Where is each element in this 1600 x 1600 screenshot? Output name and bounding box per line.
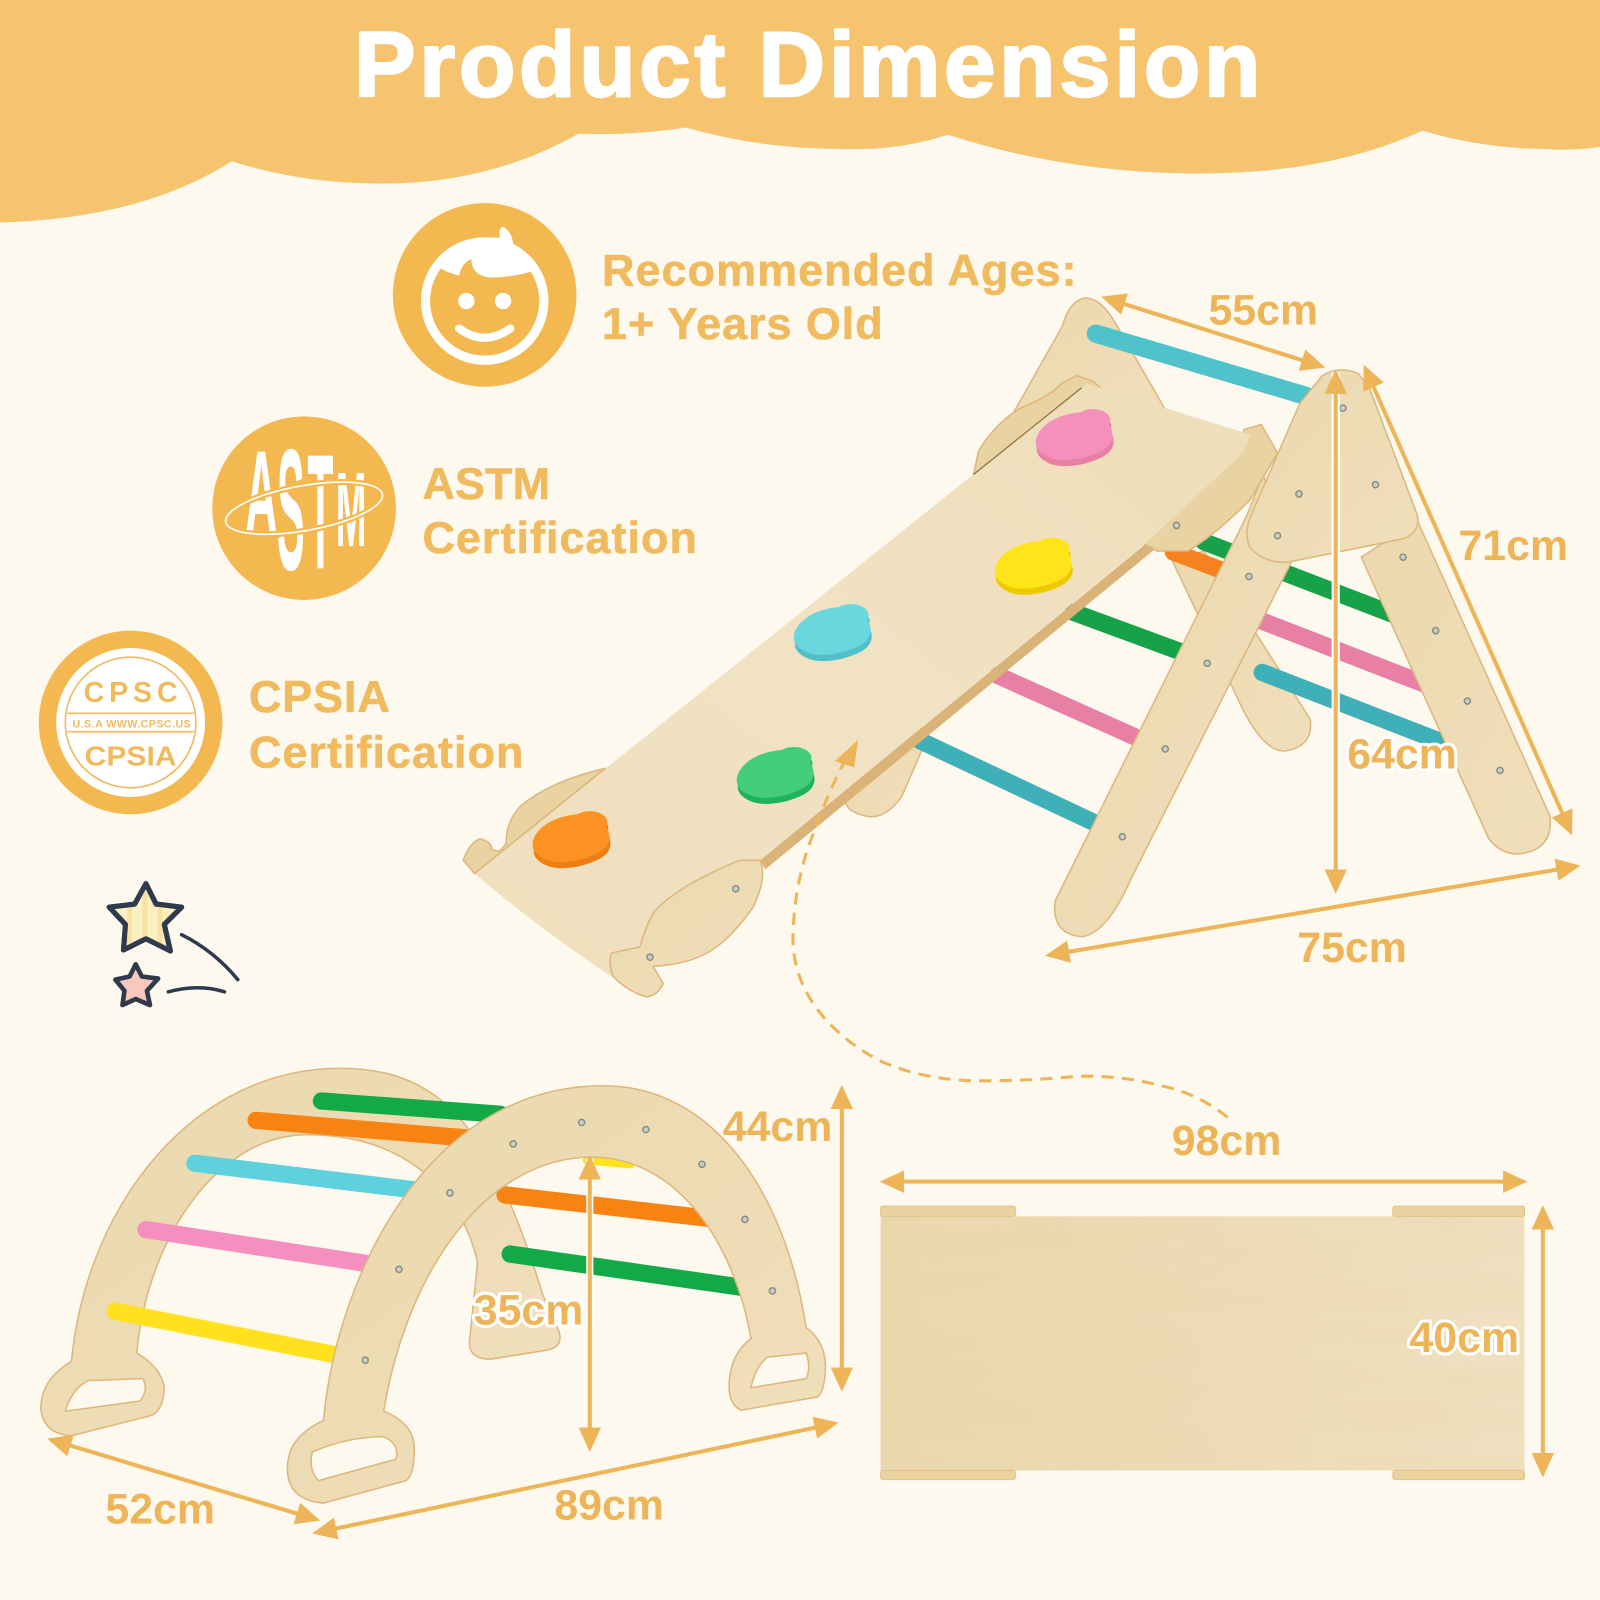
- rungs under the ramp: [920, 334, 1449, 822]
- icon: CPSC badge: CPSC: [84, 677, 178, 709]
- text: CPSIA certification: [249, 671, 523, 777]
- icon: ASTM badge: T: [307, 422, 333, 604]
- label 64cm: 64cm: [1347, 730, 1457, 778]
- front right leg: [1361, 520, 1550, 854]
- dimension: 89cm arrow: [316, 1423, 835, 1533]
- text: recommended ages: Recommended Ages:: [602, 245, 1077, 296]
- title: Product Dimension: [354, 14, 1260, 116]
- label 55cm: 55cm: [1208, 286, 1318, 334]
- header banner: [0, 0, 1600, 222]
- product: rainbow arch: [41, 1068, 826, 1503]
- dimension: 44cm arrow: [840, 1089, 844, 1388]
- icon: CPSC badge: [39, 631, 222, 814]
- text: recommended ages: [602, 245, 1077, 349]
- climbing holds: [533, 409, 1114, 868]
- label 35cm: 35cm: [474, 1286, 583, 1334]
- dashed connector arrow: [793, 740, 1228, 1117]
- product: triangle climber with ramp: [463, 298, 1550, 997]
- dimension: 71cm arrow: [1365, 368, 1570, 832]
- board wood grain: [881, 1216, 1524, 1470]
- text: ASTM certification: [422, 458, 697, 563]
- ramp lower rails: [463, 768, 605, 873]
- board corner tabs: [881, 1206, 1524, 1480]
- board surface: [881, 1216, 1524, 1470]
- ramp board: [474, 384, 1251, 993]
- icon: child face badge: [393, 203, 577, 387]
- top teal rung: [1096, 334, 1306, 396]
- text: CPSIA certification: CPSIA: [249, 671, 390, 722]
- text: ASTM certification: Certification: [422, 512, 697, 563]
- dimension: 98cm arrow: [884, 1180, 1523, 1184]
- back arch: [41, 1068, 560, 1436]
- back triangle frame: [1010, 298, 1170, 418]
- dimension: 40cm arrow: [1541, 1209, 1545, 1473]
- screws: [647, 405, 1503, 960]
- ramp board edge line: [474, 388, 1082, 873]
- label 98cm: 98cm: [1172, 1117, 1281, 1165]
- ramp underside edge: [760, 543, 1155, 869]
- icon: ASTM badge: S: [277, 413, 305, 607]
- dimension: 35cm arrow: [586, 1159, 593, 1448]
- label 44cm: 44cm: [723, 1103, 832, 1151]
- label 52cm: 52cm: [105, 1485, 215, 1533]
- arch rungs: [115, 1101, 745, 1355]
- dimension: 55cm arrow: [1105, 298, 1321, 366]
- icon: CPSC badge: U.S.A WWW.CPSC.US: [72, 719, 191, 731]
- label 75cm: 75cm: [1297, 924, 1407, 972]
- front triangle plate: [1247, 370, 1418, 562]
- icon: CPSC badge: CPSIA: [85, 740, 177, 771]
- text: recommended ages: 1+ Years Old: [602, 298, 883, 349]
- front arch: [287, 1086, 826, 1503]
- icon: stars: [109, 878, 238, 1005]
- ramp top rails: [973, 376, 1102, 474]
- icon: ASTM badge: [212, 413, 396, 607]
- back legs: [1172, 551, 1311, 751]
- text: CPSIA certification: Certification: [249, 726, 523, 777]
- label 71cm: 71cm: [1458, 522, 1568, 570]
- icon: ASTM badge: M: [336, 450, 366, 569]
- arch screws: [362, 1119, 776, 1363]
- dimension: 52cm arrow: [51, 1440, 316, 1519]
- label 89cm: 89cm: [554, 1481, 664, 1529]
- dimension: 64cm height line: [1332, 372, 1340, 890]
- label 40cm: 40cm: [1409, 1314, 1519, 1362]
- product: flat ramp board: [881, 1206, 1524, 1480]
- icon: ASTM badge: A: [245, 427, 278, 562]
- dimension: 75cm arrow: [1049, 866, 1577, 955]
- text: ASTM certification: ASTM: [422, 458, 550, 509]
- front left leg: [1055, 474, 1291, 937]
